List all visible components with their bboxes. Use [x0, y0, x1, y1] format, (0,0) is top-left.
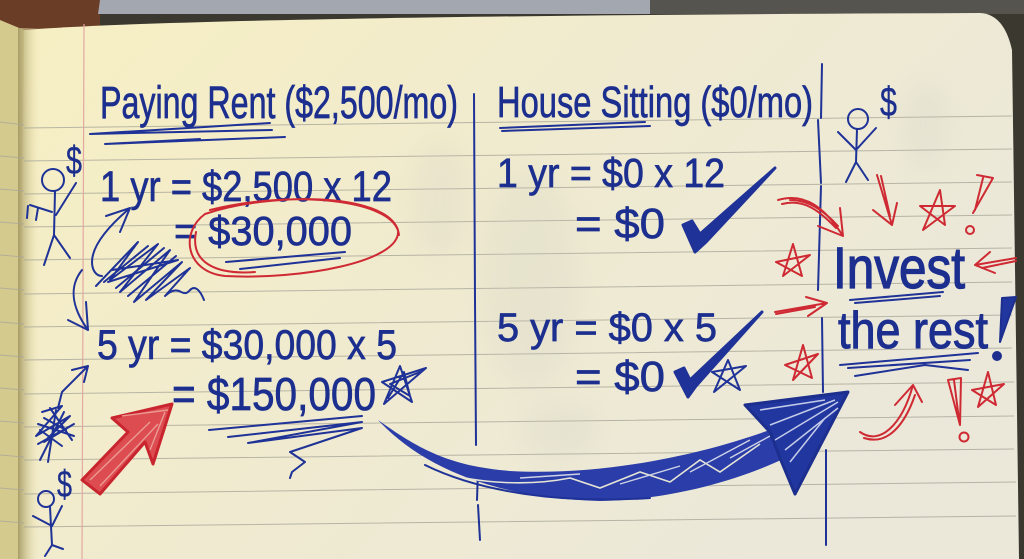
column divider 1 [474, 94, 480, 540]
house sitting calculation 5 years: = $0 [575, 353, 665, 401]
red circle [190, 199, 399, 277]
star scribble [382, 366, 426, 404]
house sitting calculation 1 year [497, 150, 775, 252]
star [785, 345, 818, 380]
margin line [82, 24, 84, 559]
exclamation dot [960, 432, 968, 442]
big red arrow [82, 404, 172, 494]
exclamation [948, 378, 961, 425]
doodles: bottom-left scribble [36, 366, 88, 462]
big blue swoosh arrow [378, 392, 848, 501]
exclamation [1000, 297, 1016, 342]
house sitting calculation 5 years [497, 306, 762, 401]
rent calculation 1 year: = $30,000 [174, 208, 352, 254]
underline [226, 252, 345, 269]
heading: House Sitting: House Sitting ($0/mo) [497, 78, 813, 127]
stick figure with money, right: $ [880, 78, 897, 125]
heading: Paying Rent [90, 77, 458, 144]
house sitting calculation 1 year: = $0 [575, 200, 665, 248]
scribble [96, 242, 204, 302]
heading: Paying Rent: Paying Rent ($2,500/mo) [100, 77, 458, 128]
check mark [683, 168, 775, 252]
callout: Invest the rest [833, 236, 1016, 376]
star [712, 360, 746, 392]
arrow [975, 252, 1016, 273]
rent calculation 1 year: 1 yr = $2,500 x 12 [100, 163, 392, 211]
heading underline [90, 123, 285, 144]
rent calculation 1 year [100, 163, 399, 277]
arrow [778, 198, 843, 236]
arrow [873, 175, 897, 225]
stick figure with money, right [838, 78, 897, 182]
callout: Invest the rest: Invest [833, 236, 965, 301]
star [776, 244, 810, 276]
smudges [412, 80, 947, 460]
stick figure with money, left top: $ [66, 139, 82, 183]
doodles: left arrows and scribble [68, 208, 204, 330]
exclamation dot [966, 226, 974, 234]
arrow [775, 297, 827, 316]
left facing page [0, 20, 24, 559]
rent calculation 5 years [97, 321, 426, 478]
curved arrow [860, 385, 922, 440]
underline [840, 353, 978, 376]
ruled lines [0, 116, 1016, 527]
house sitting calculation 5 years: 5 yr = $0 x 5 [497, 306, 717, 350]
head [745, 392, 848, 494]
shaft [378, 420, 785, 501]
check mark [675, 312, 762, 397]
star [972, 372, 1004, 407]
house sitting calculation 1 year: 1 yr = $0 x 12 [497, 150, 725, 196]
underline scribble [209, 416, 362, 478]
column divider 2 [818, 64, 826, 545]
heading underline [500, 122, 650, 131]
callout: Invest the rest: the rest [838, 302, 988, 360]
stick figure with money, left bottom: $ [57, 464, 72, 506]
stick figure with money, left top [27, 139, 82, 265]
red accent doodles around callout [775, 175, 1016, 442]
underline [850, 292, 943, 303]
stick figure with money, left bottom [33, 464, 72, 556]
rent calculation 5 years: 5 yr = $30,000 x 5 [97, 321, 397, 368]
exclamation [973, 175, 993, 213]
rent calculation 5 years: = $150,000 [172, 368, 376, 420]
star [920, 190, 955, 230]
